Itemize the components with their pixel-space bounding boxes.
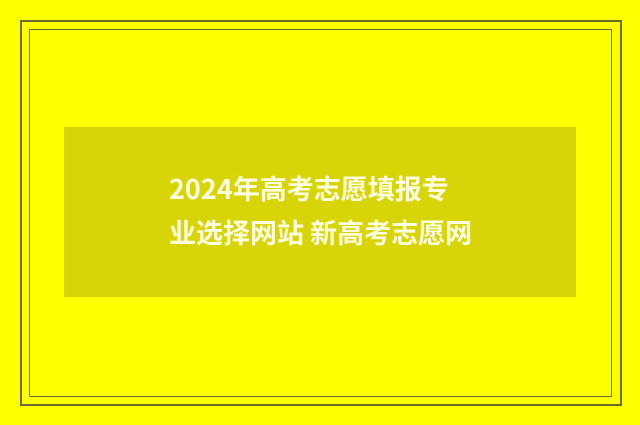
title panel (64, 127, 576, 297)
inner border frame (29, 29, 612, 397)
title line 1: 2024年高考志愿填报专 (169, 168, 449, 207)
title line 2: 业选择网站 新高考志愿网 (169, 212, 472, 251)
